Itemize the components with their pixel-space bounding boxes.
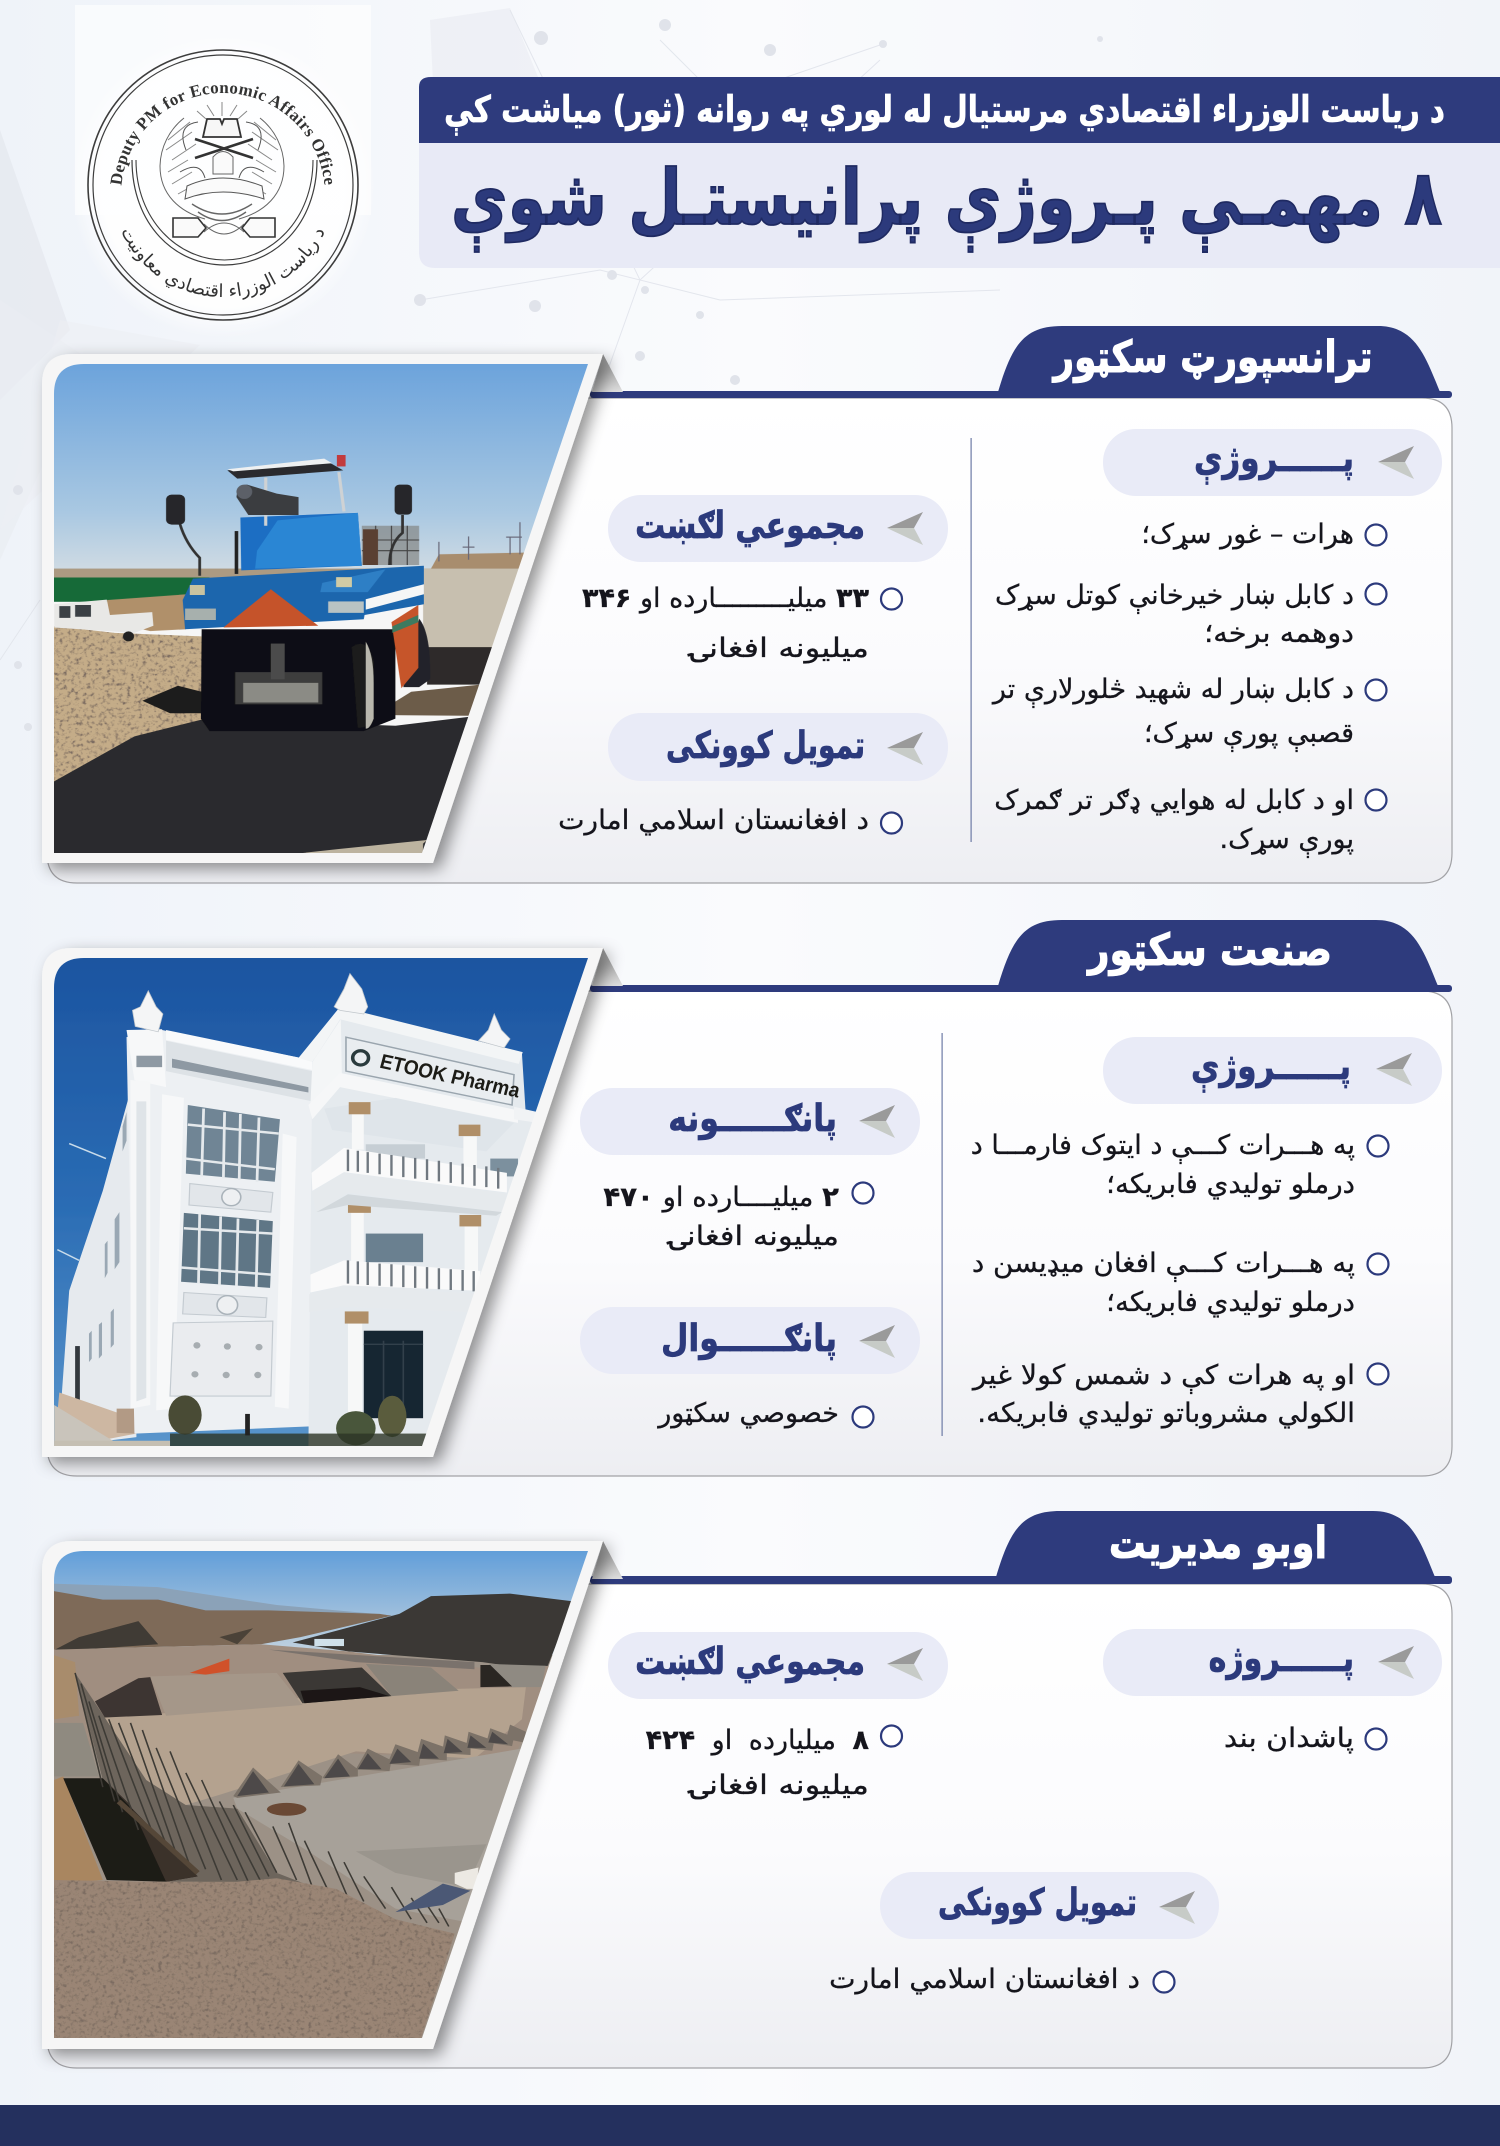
chute blocks [233,1725,526,1798]
total cost value: میلیونه افغانۍ [687,1770,869,1801]
gravel foreground [51,1878,455,2044]
panel background [47,991,1452,1476]
projects list: او په هرات کې د شمس کولا غیر [971,1359,1355,1395]
logo emblem [160,102,284,237]
section tab: صنعت سکټور [1086,924,1332,976]
logo circular Pashto text [112,200,334,297]
funder pill [880,1872,1219,1939]
shrubs [168,1395,202,1435]
windows [186,1105,280,1182]
section tab [590,326,1452,398]
vehicle [455,1867,478,1889]
funder pill: تمویل کوونکی [666,723,865,768]
photo: ETOOK Pharma factory: ETOOK Pharma [377,1050,523,1103]
cage and mirrors [362,526,419,565]
project list: او د کابل له هوایي ډګر تر ګمرک [994,785,1354,816]
main title band [419,143,1500,268]
header banner [419,77,1500,268]
funder pill: تمویل کوونکی [938,1880,1137,1925]
total cost value [646,1725,902,1801]
column divider [942,1033,943,1436]
projects list [971,1130,1388,1429]
section tab [590,1511,1452,1584]
main title band: ۸ مهمـې پـروژې پرانیستـل شوې [451,155,1442,253]
roller body [183,566,424,629]
funder value: د افغانستان اسلامي امارت [829,1963,1140,1995]
roller wheels and frame [201,629,395,731]
logo: deputy PM seal [75,5,362,321]
project pill [1103,429,1442,496]
total cost value: ۸ میلیارده او ۴۲۴ [646,1725,870,1756]
logo circular English text [121,93,325,195]
total cost pill [608,495,948,562]
project value: پاشدان بند [1224,1722,1354,1754]
project list: د کابل ښار له شهید څلورلارې تر [991,674,1354,708]
projects list: په هـــرات کـــې افغان میډیسن د [972,1248,1355,1282]
columns [348,1114,478,1419]
investment value: ۲ میلیــــارده او ۴۷۰ [603,1182,839,1213]
projects list: درملو تولیدي فابریکه؛ [1106,1169,1355,1200]
investor value: خصوصي سکټور [656,1398,839,1429]
project pill: پــــــروژه [1209,1637,1354,1681]
photo: road roller [42,354,623,863]
panel background [47,398,1452,883]
canopy and driver [266,472,344,526]
project pill: پــــــروژې [1194,437,1354,485]
total cost pill [608,1632,948,1699]
subtitle bar [419,77,1500,143]
background network pattern [0,8,1103,731]
project list: پورې سړک. [1220,824,1354,858]
excavator [190,1659,229,1675]
projects pill [1103,1037,1442,1104]
investor pill [580,1307,920,1374]
logo: deputy PM seal: Deputy PM for Economic Affairs Office [110,84,333,186]
projects list: درملو تولیدي فابریکه؛ [1106,1287,1355,1318]
left wing [61,1084,136,1446]
investment value: میلیونه افغانۍ [666,1220,839,1252]
total cost value: میلیونه افغانۍ [687,633,869,664]
door [364,1331,423,1418]
subtitle bar: د ریاست الوزراء اقتصادي مرستیال له لوري په روانه (ثور) میاشت کې [444,88,1445,136]
total cost pill: مجموعي لګښت [635,504,865,548]
spillway floor [233,1748,526,1923]
column divider [970,438,972,842]
total cost pill: مجموعي لګښت [635,1640,865,1684]
investment value [603,1182,874,1252]
projects list: په هـــرات کـــې د ایتوک فارمـــا د [971,1130,1355,1164]
project pill [1103,1629,1442,1696]
photo: Pashdan dam [42,1541,623,2049]
projects pill: پــــــروژې [1191,1045,1351,1093]
investment pill [580,1088,920,1155]
project list: د کابل ښار خیرخانې کوتل سړک [995,580,1354,614]
section tab: اوبو مدیریت [1109,1517,1327,1569]
section tab: ترانسپورټ سکټور [1052,333,1373,383]
rebar [75,1673,449,1926]
project list [991,519,1386,858]
funder pill [608,713,948,781]
investor pill: پانګــــــوال [661,1318,837,1361]
white pickup [54,600,153,633]
project list: دوهمه برخه؛ [1204,617,1354,649]
photo: ETOOK Pharma factory [42,948,623,1457]
panel background [47,1584,1452,2068]
dam face [105,1687,526,1805]
project list: قصبې پورې سړک؛ [1144,718,1354,752]
total cost value [582,583,902,664]
section: water management [42,1511,1452,2068]
finials [132,974,510,1048]
footer bar [0,2105,1500,2146]
funder value: د افغانستان اسلامي امارت [558,804,869,836]
section tab [590,920,1452,992]
main block [127,1030,312,1434]
projects list: الکولي مشروباتو تولیدي فابریکه. [977,1398,1355,1429]
right tower [308,1019,532,1446]
balconies [312,1148,507,1216]
windows tower [366,1234,423,1262]
project list: هرات – غور سړک؛ [1141,519,1354,550]
investment pill: پانګــــــونه [668,1098,837,1141]
rebar wall base [76,1674,302,1883]
logo: deputy PM seal: د ریاست الوزراء اقتصادي معاونیت [122,230,324,300]
section: transport [42,326,1452,883]
total cost value: ۳۳ میلیـــــــــارده او ۳۴۶ [582,583,870,614]
section: industry [42,920,1452,1476]
